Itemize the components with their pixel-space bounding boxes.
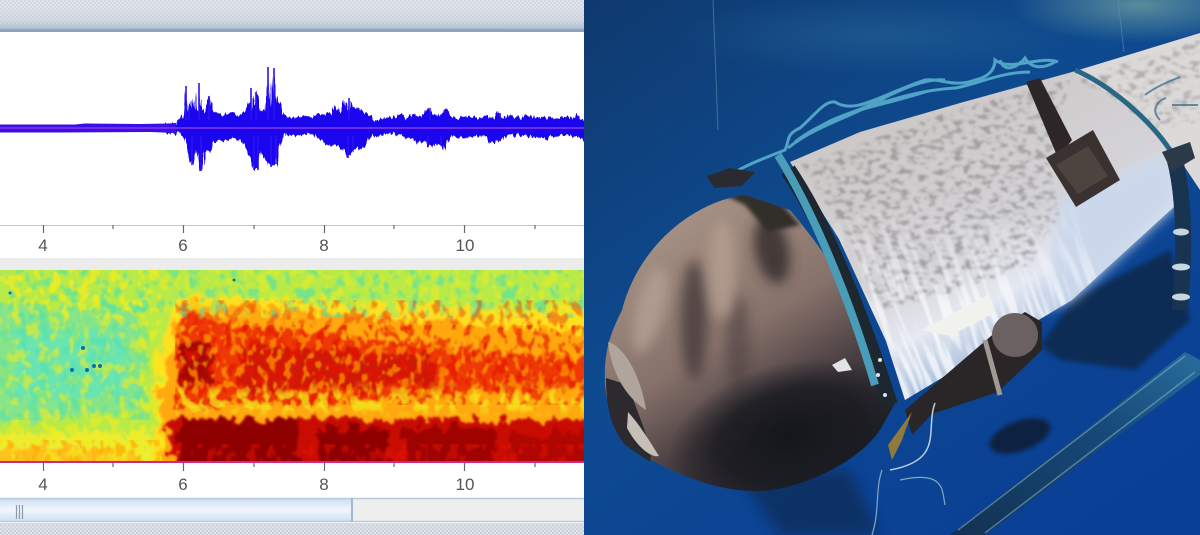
- panel: acoustic analysis software screenshot: [0, 0, 620, 535]
- main hull: [790, 40, 1200, 424]
- axis label: 4: 4: [38, 236, 48, 255]
- waveform time axis: [0, 225, 584, 255]
- rear hull logo: [1145, 77, 1198, 120]
- noise dots: [8, 278, 236, 372]
- window toolbar top: [0, 0, 584, 32]
- front ring band: [778, 155, 890, 405]
- axis label: 6: 6: [178, 475, 188, 494]
- spectrogram time axis: [38, 463, 535, 494]
- axis label: 10: 10: [456, 475, 474, 494]
- scrollbar: [0, 498, 584, 522]
- cage rails and lower structure: [735, 250, 1200, 535]
- spectrogram heat map: [0, 270, 584, 461]
- spectrogram baseline: [0, 461, 584, 463]
- ocean background: [584, 0, 1200, 535]
- waveform chart: [0, 67, 590, 171]
- axis label: 8: 8: [319, 236, 329, 255]
- axis label: 8: 8: [319, 475, 329, 494]
- axis label: 10: 10: [456, 236, 474, 255]
- black strap and box: [1026, 78, 1120, 207]
- blue ropes: [725, 58, 1058, 178]
- axis label: 4: 4: [38, 475, 48, 494]
- window footer: [0, 523, 584, 535]
- axis label: 6: 6: [178, 236, 188, 255]
- dome end cap: [604, 195, 897, 491]
- side thruster: [872, 295, 1042, 535]
- panel: submersible underwater photo: [584, 0, 1200, 535]
- rear end ring: [1075, 70, 1195, 310]
- divider strip between charts: [0, 258, 584, 270]
- rear hull section: [1072, 33, 1200, 190]
- viewport ring: [606, 342, 659, 462]
- front bracket: [707, 168, 755, 188]
